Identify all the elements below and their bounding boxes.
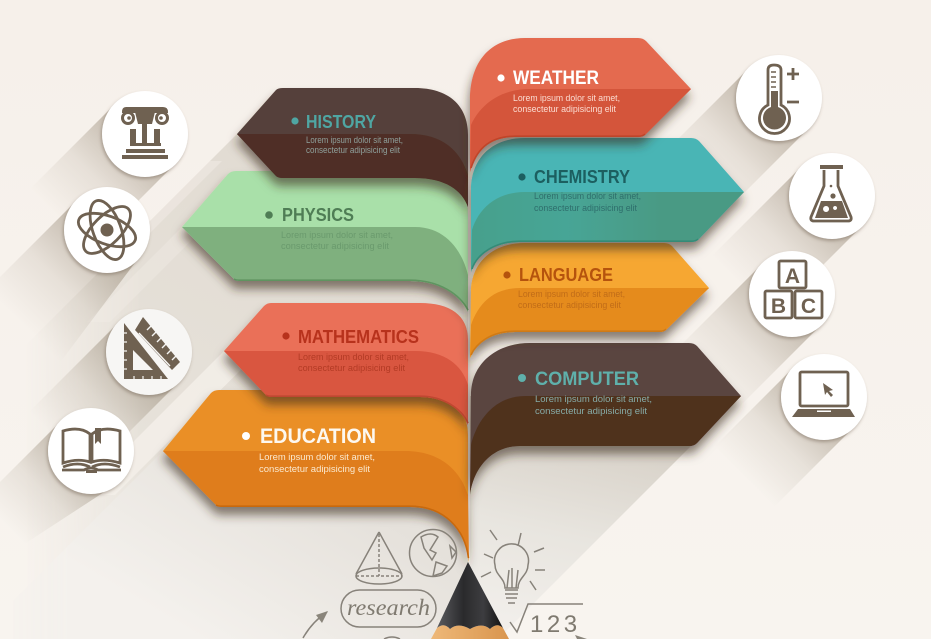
physics label: consectetur adipisicing elit xyxy=(281,241,390,251)
weather label: Lorem ipsum dolor sit amet, xyxy=(513,93,620,103)
weather label xyxy=(497,68,620,114)
arrow: history xyxy=(237,88,468,207)
chemistry label: consectetur adipisicing elit xyxy=(534,203,638,213)
doodle: cone xyxy=(356,532,402,584)
arrow: mathematics xyxy=(224,303,468,425)
doodle: globe xyxy=(410,530,456,576)
chemistry label: CHEMISTRY xyxy=(534,167,630,187)
history label xyxy=(291,112,403,155)
arrow: physics xyxy=(182,171,468,312)
weather label: WEATHER xyxy=(513,68,599,89)
language label xyxy=(503,265,625,310)
icon: open book xyxy=(48,408,134,494)
mathematics label: consectetur adipisicing elit xyxy=(298,363,406,373)
icon: alphabet blocks xyxy=(749,251,835,337)
language label: consectetur adipisicing elit xyxy=(518,300,622,310)
icon: alphabet blocks: B xyxy=(771,295,786,318)
language label: Lorem ipsum dolor sit amet, xyxy=(518,289,625,299)
chemistry label: Lorem ipsum dolor sit amet, xyxy=(534,191,641,201)
icon: column xyxy=(102,91,188,177)
icon: alphabet blocks: A xyxy=(785,265,800,288)
long diagonal shadow regions xyxy=(70,134,690,639)
arrow: computer xyxy=(470,343,741,495)
icon: alphabet blocks: C xyxy=(801,295,816,318)
education label: Lorem ipsum dolor sit amet, xyxy=(259,452,375,462)
physics label: PHYSICS xyxy=(282,205,354,225)
history label: HISTORY xyxy=(306,112,376,132)
arrow: education xyxy=(163,390,469,562)
doodle: research label: research xyxy=(347,595,430,620)
chemistry label xyxy=(518,167,641,213)
doodle: light bulb xyxy=(481,530,545,603)
circle shadows xyxy=(0,68,862,560)
computer label: COMPUTER xyxy=(535,368,639,390)
arrow: weather xyxy=(470,38,691,172)
mathematics label xyxy=(282,327,419,373)
icon: thermometer xyxy=(736,55,822,141)
doodle: research label xyxy=(341,590,436,627)
arrow: language xyxy=(470,243,709,358)
doodle: square root 123: 123 xyxy=(530,611,581,638)
education label: EDUCATION xyxy=(260,425,376,448)
education label xyxy=(242,425,376,474)
physics label: Lorem ipsum dolor sit amet, xyxy=(281,230,393,240)
history label: Lorem ipsum dolor sit amet, xyxy=(306,135,403,145)
education label: consectetur adipisicing elit xyxy=(259,464,371,474)
computer label: consectetur adipisicing elit xyxy=(535,406,648,416)
doodle: arrows and circle xyxy=(303,611,587,639)
history label: consectetur adipisicing elit xyxy=(306,145,401,155)
pencil xyxy=(431,562,509,639)
mathematics label: MATHEMATICS xyxy=(298,327,419,347)
physics label xyxy=(265,205,393,251)
language label: LANGUAGE xyxy=(519,265,613,285)
arrow: chemistry xyxy=(471,138,744,272)
computer label xyxy=(518,368,652,416)
icon: laptop xyxy=(781,354,867,440)
doodle: square root 123 xyxy=(510,604,583,638)
icon: flask xyxy=(789,153,875,239)
mathematics label: Lorem ipsum dolor sit amet, xyxy=(298,352,409,362)
icon: ruler and set square xyxy=(106,309,192,395)
computer label: Lorem ipsum dolor sit amet, xyxy=(535,394,652,404)
icon: atom xyxy=(64,187,150,273)
weather label: consectetur adipisicing elit xyxy=(513,104,617,114)
